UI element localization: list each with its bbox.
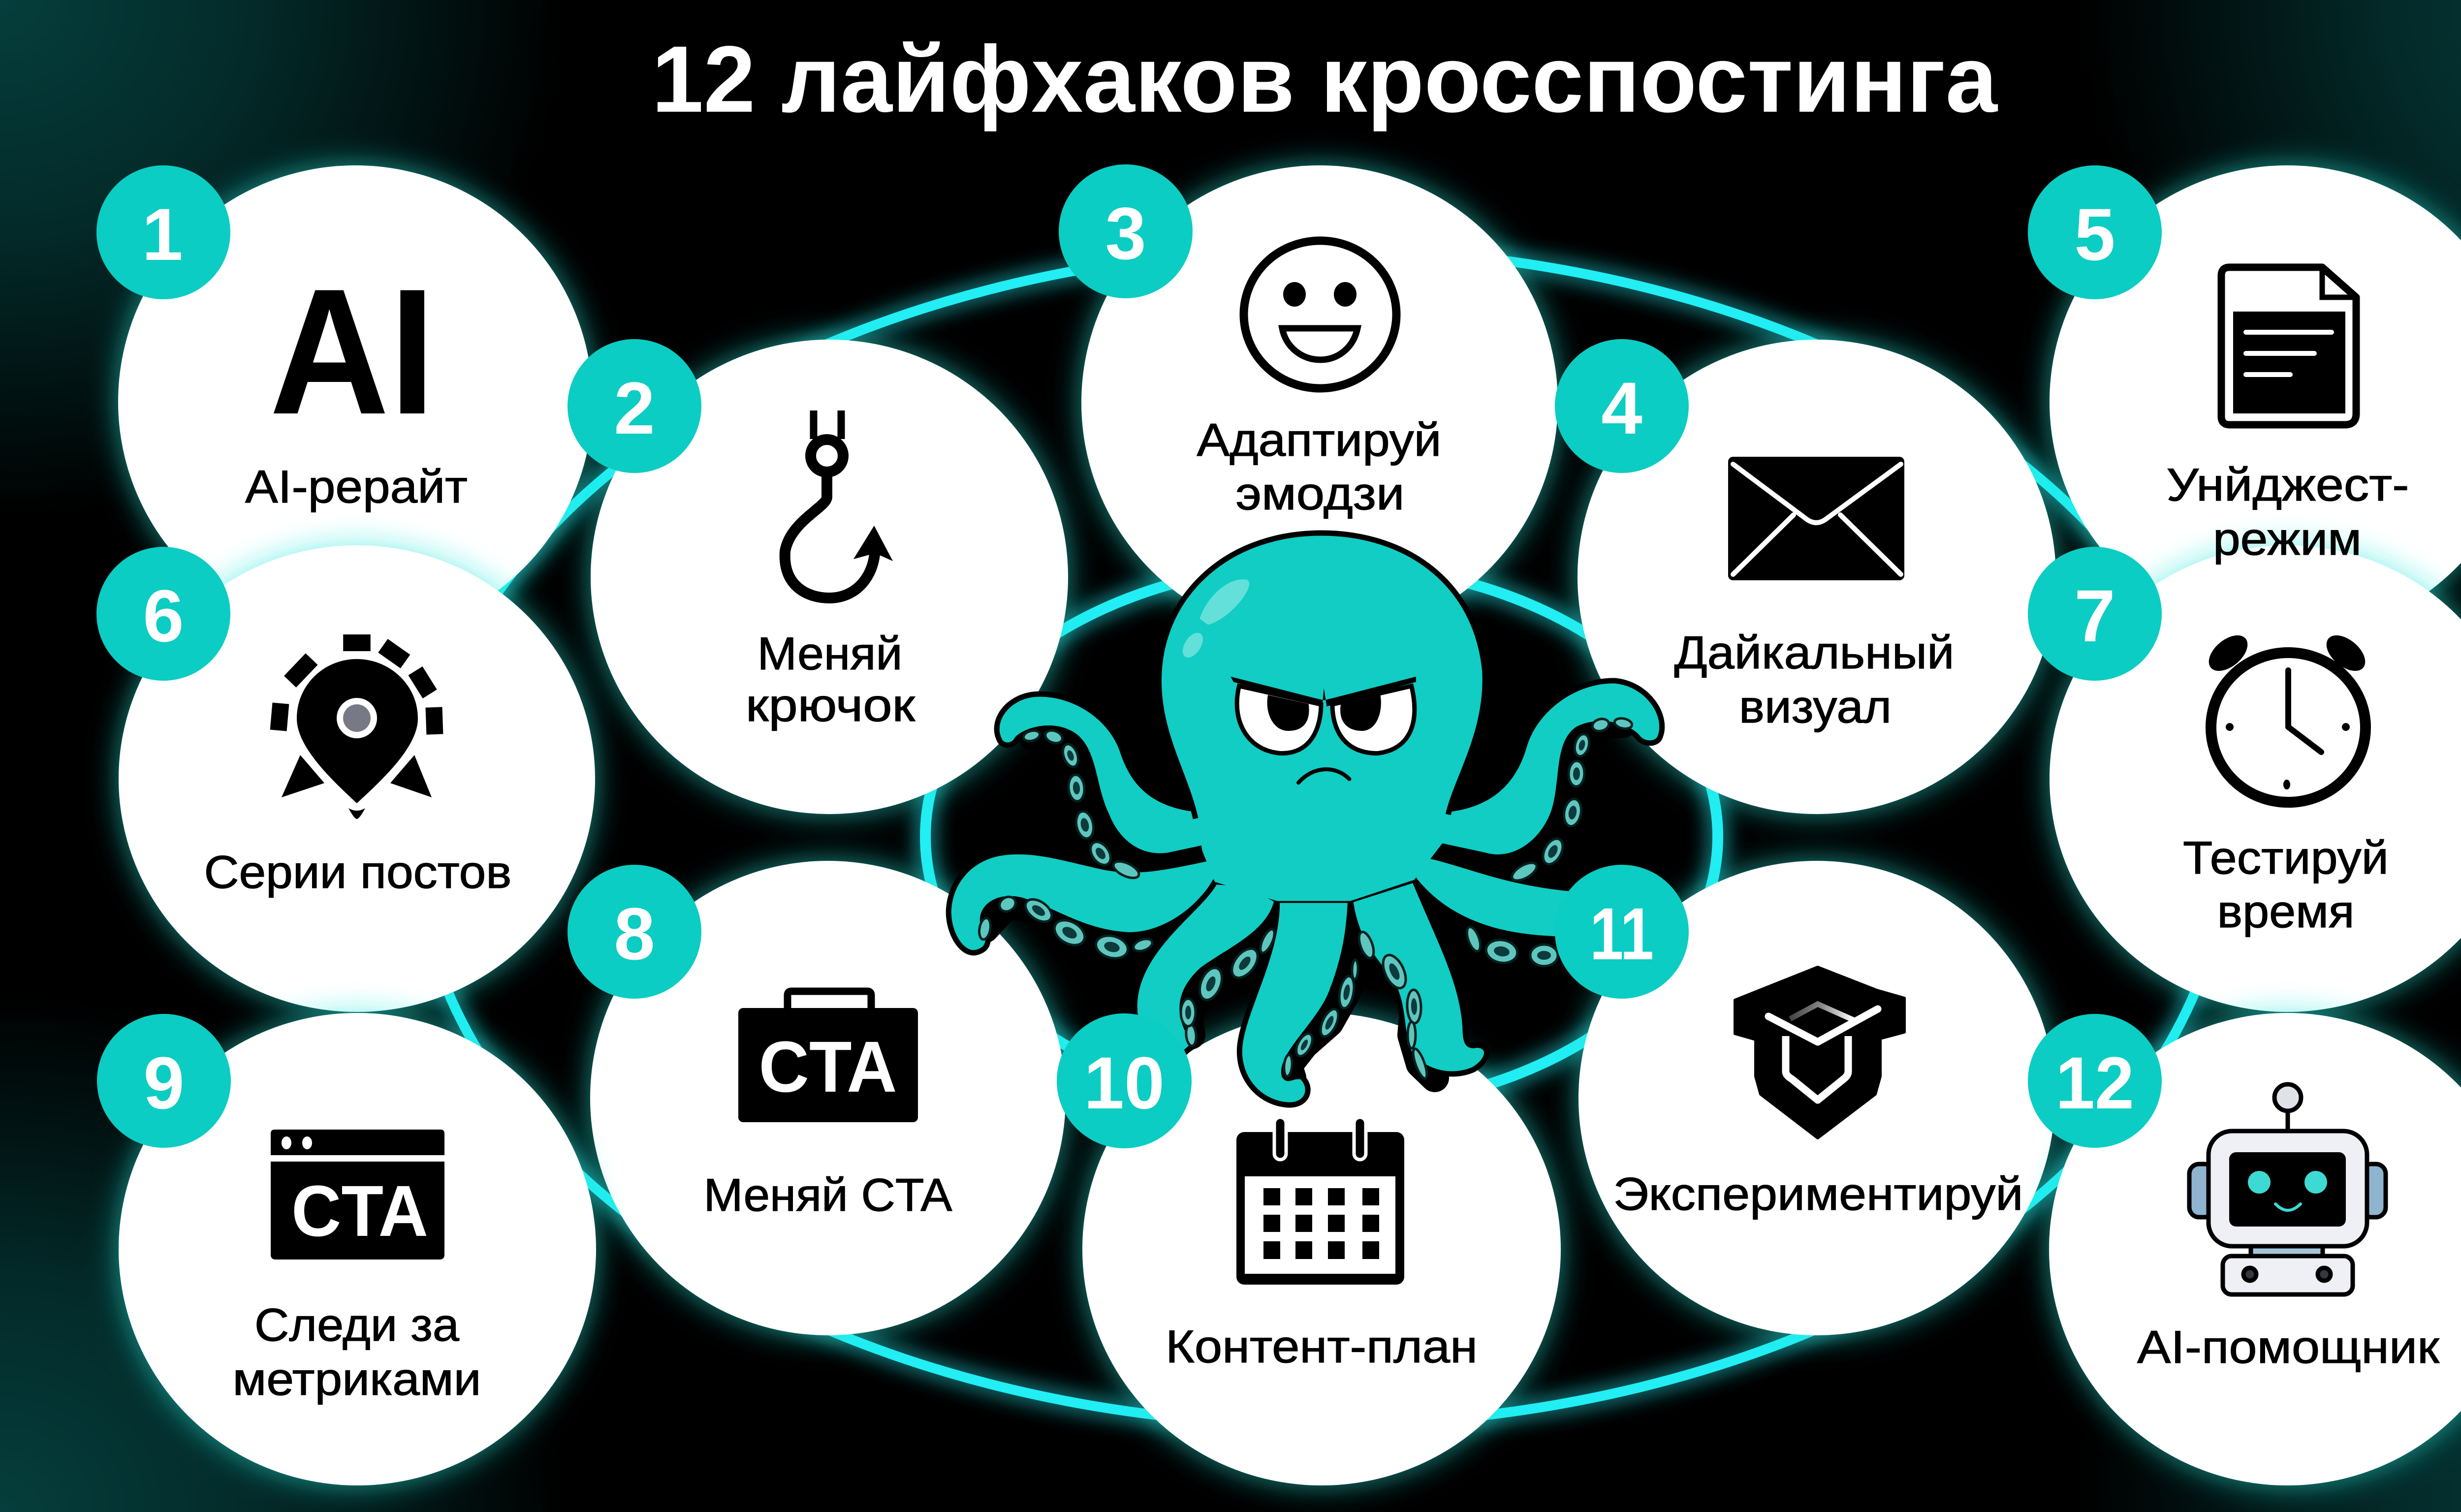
panel 9: Следи за метриками [97,1013,596,1485]
label: Следи за [254,1299,460,1351]
right pupil [1340,695,1381,731]
icon: location pin [279,643,435,819]
panel 11: Экспериментируй [1555,861,2055,1335]
icon: CTA browser window [271,1130,444,1260]
left pupil [1267,695,1309,731]
mouth [1298,769,1349,783]
sucker holes [1030,739,1586,1051]
octopus tentacles [948,533,1662,1105]
connecting rings [416,249,2227,1425]
panel 4: Дайкальный визуал [1555,339,2056,814]
icon: shield with graduation cap [1735,967,1904,1138]
badge 3 [1059,164,1193,298]
label: Адаптируй [1197,414,1441,466]
badge 7 [2028,547,2162,681]
badge 5 [2028,165,2162,299]
octopus mascot [948,533,1662,1105]
badge 12 [2028,1014,2162,1148]
badge 12: 12 [2055,1041,2134,1124]
badge 6 [96,547,230,681]
icon: calendar [1236,1117,1404,1285]
label: режим [2213,513,2362,565]
label [2183,832,2389,937]
icon: robot [2189,1084,2386,1294]
icon: CTA browser window: CTA [291,1171,428,1252]
badge 8: 8 [614,892,655,975]
icon: CTA briefcase [738,991,918,1122]
badge 7: 7 [2074,574,2115,657]
label: AI-помощник [2137,1321,2440,1373]
label: время [2217,885,2355,937]
label [1674,627,1954,732]
label: Контент-план [1166,1321,1478,1372]
icon: document [2221,267,2356,425]
panel 12: AI-помощник [2028,1013,2461,1485]
icon: smiley [1244,241,1396,388]
panel 1: AI-рерайт [96,165,593,638]
octopus head outline [1159,533,1485,819]
label [232,1299,481,1405]
panel 10: Контент-план [1057,1013,1561,1485]
head highlights [1179,579,1249,660]
panel 8: Меняй CTA [568,861,1066,1335]
icon: CTA briefcase: CTA [759,1027,897,1107]
panel 5: Унйджест-режим [2028,165,2461,638]
label: Меняй CTA [704,1169,952,1221]
panel 3: Адаптируй эмодзи [1059,164,1558,640]
octopus head and body [1159,533,1485,901]
badge 1 [96,165,230,299]
label [2167,459,2409,565]
angry brows [1230,677,1416,706]
octopus suckers [978,717,1633,1080]
badge 1: 1 [142,193,183,276]
icon: fish hook [785,410,893,598]
badge 11: 11 [1590,892,1654,975]
icon: envelope [1728,457,1904,580]
octopus face [1179,579,1416,783]
icon: AI: AI [270,252,435,452]
badge 8 [568,865,701,999]
icon: alarm clock [2202,629,2372,802]
label: Серии постов [204,846,512,898]
badge 10 [1057,1013,1192,1148]
label [1197,414,1441,519]
label: AI-рерайт [245,461,468,512]
badge 2: 2 [614,367,655,449]
badge 3: 3 [1105,192,1146,275]
badge 2 [568,339,701,473]
badge 11 [1555,865,1689,999]
label: метриками [232,1353,481,1405]
panel 6: Серии постов [96,545,595,1012]
badge 9: 9 [143,1041,185,1124]
title: 12 лайфхаков кросспостинга [652,26,1998,132]
label: крючок [746,679,915,731]
label: Тестируй [2183,832,2389,883]
badge 9 [97,1014,231,1148]
panel 2: Меняй крючок [568,339,1068,814]
left eye [1237,686,1321,754]
badge 6: 6 [143,574,184,657]
label: эмодзи [1235,468,1405,519]
right eye [1332,686,1415,754]
label: Экспериментируй [1613,1168,2023,1220]
label: Дайкальный [1674,627,1954,678]
badge 10: 10 [1084,1041,1165,1124]
label: Унйджест- [2167,459,2409,510]
badge 4: 4 [1601,367,1642,449]
octopus sucker backing strips [985,724,1623,1078]
badge 5: 5 [2074,193,2115,276]
label: Меняй [757,628,903,679]
panel 7: Тестируй время [2028,545,2461,1012]
label: визуал [1739,681,1892,732]
label [746,628,915,731]
badge 4 [1555,339,1689,473]
